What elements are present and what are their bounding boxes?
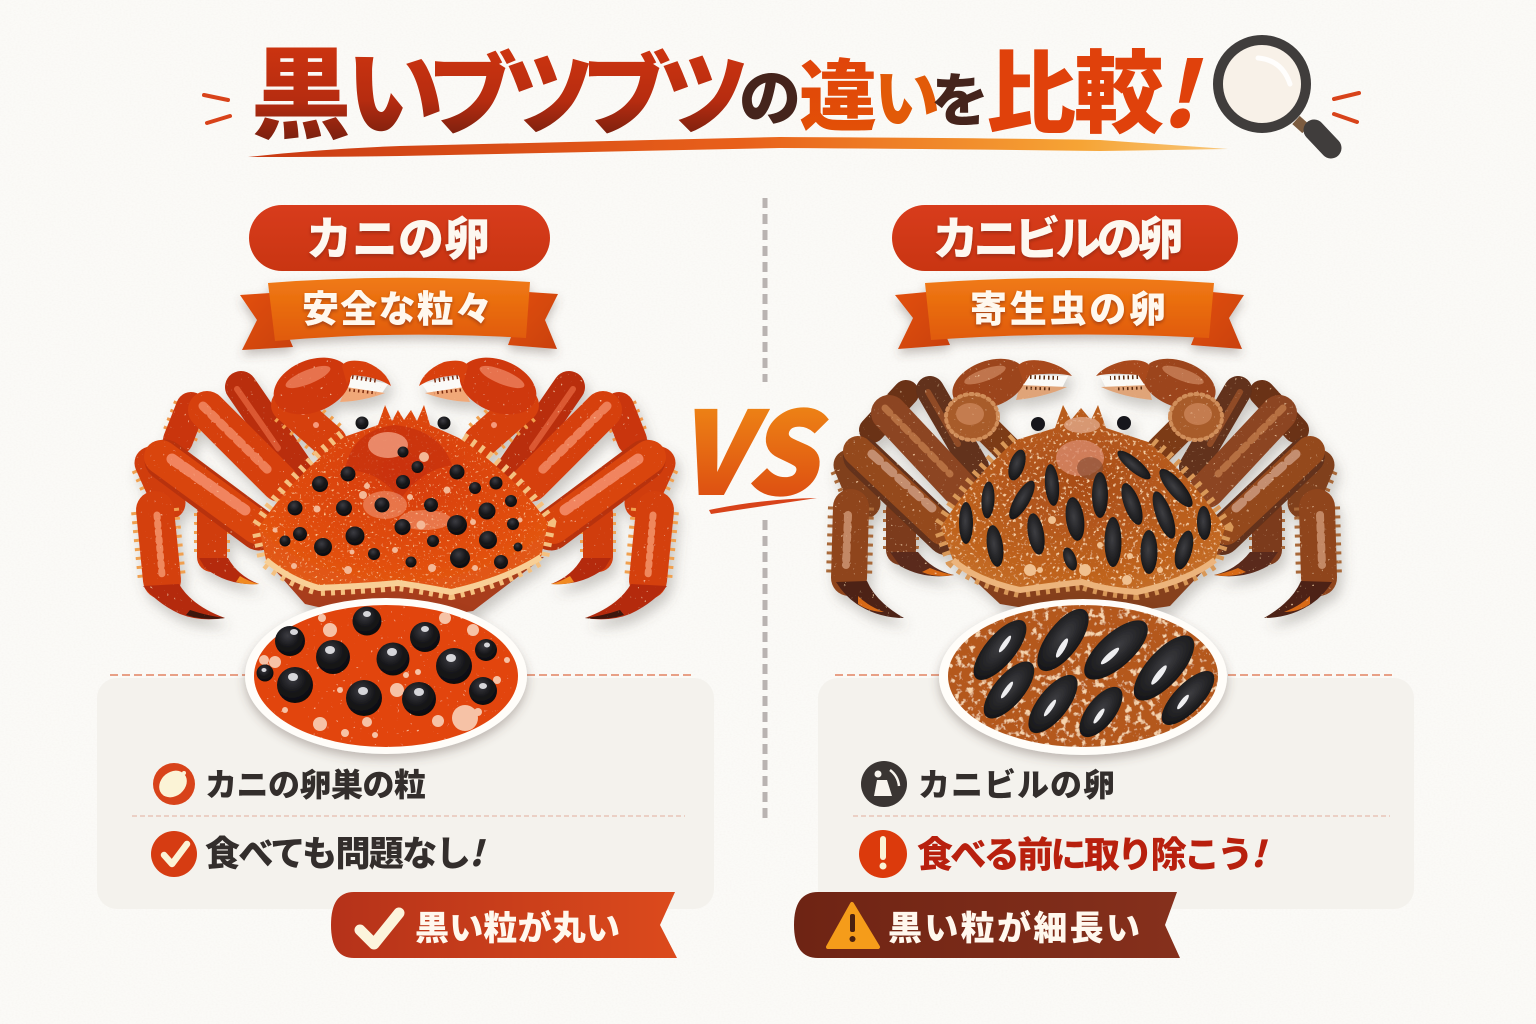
center divider <box>762 198 768 818</box>
title text: 黒 <box>251 14 351 159</box>
panel: rhizocephalan / leech eggs (right) <box>794 203 1414 958</box>
title text: 較 <box>1074 21 1164 151</box>
icon: magnifying glass <box>1218 40 1331 148</box>
crab legs and claws <box>143 347 667 619</box>
title left sparks <box>204 95 230 123</box>
crab legs and claws <box>836 349 1332 618</box>
title text: 違 <box>799 35 877 147</box>
dashed rule <box>835 674 1395 676</box>
info panel background <box>818 678 1414 909</box>
title underline brush <box>248 137 1228 157</box>
VS underline <box>709 498 817 514</box>
row: safe to eat: 食べても問題なし! <box>205 826 486 877</box>
VS mark: VS <box>676 363 828 527</box>
icon: leech figure <box>861 761 907 807</box>
crab illustration: red king crab <box>143 347 667 619</box>
ribbon: elongated black grains: 黒い粒が細長い <box>888 901 1140 950</box>
title text: ブ <box>581 23 671 153</box>
icon: check <box>151 831 197 877</box>
ribbon: parasite eggs: 寄生虫の卵 <box>970 279 1166 333</box>
ribbon: safe grains: 安全な粒々 <box>302 279 492 333</box>
crab carapace <box>941 405 1225 613</box>
icon: egg <box>153 763 195 805</box>
crab illustration: crab with leech eggs <box>836 349 1332 618</box>
dashed rule <box>110 674 695 676</box>
header pill: leech eggs: カニビルの卵 <box>932 203 1184 269</box>
title text: ツ <box>504 23 594 153</box>
dotted rule <box>132 815 685 817</box>
title <box>204 14 1359 159</box>
ribbon: safe grains <box>240 278 558 350</box>
info panel background <box>97 678 714 909</box>
icon: big check <box>360 913 399 944</box>
icon: warning triangle <box>828 904 878 947</box>
title text: を <box>931 54 989 138</box>
inset: elongated eggs close-up <box>939 599 1227 755</box>
icon: exclamation <box>859 830 907 878</box>
title text: ブ <box>427 23 517 153</box>
title text: ツ <box>659 23 749 153</box>
header pill: crab eggs <box>249 203 550 271</box>
title text: ! <box>1160 23 1204 153</box>
crab eyes and black grains (round) <box>280 416 522 569</box>
header pill: crab eggs: カニの卵 <box>306 203 490 269</box>
ribbon: round black grains: 黒い粒が丸い <box>415 901 620 950</box>
black elongated eggs <box>959 447 1212 574</box>
panel: crab eggs (left) <box>97 203 714 958</box>
title text: い <box>874 46 940 142</box>
dotted rule <box>853 815 1390 817</box>
title text: 比 <box>986 21 1076 151</box>
title text: の <box>739 48 801 138</box>
row: remove before eating: 食べる前に取り除こう! <box>917 826 1269 878</box>
crab carapace <box>259 405 548 617</box>
title text: い <box>346 15 444 157</box>
title text <box>251 14 1204 159</box>
inset: round grains close-up <box>245 598 527 755</box>
row: leech eggs label: カニビルの卵 <box>918 760 1115 806</box>
ribbon: parasite eggs <box>895 278 1244 349</box>
ribbon: elongated black grains <box>794 892 1180 958</box>
row: crab ovary grains: カニの卵巣の粒 <box>205 760 426 806</box>
crab eyes <box>1031 416 1131 431</box>
title right sparks <box>1334 93 1359 122</box>
ribbon: round black grains <box>331 892 677 958</box>
